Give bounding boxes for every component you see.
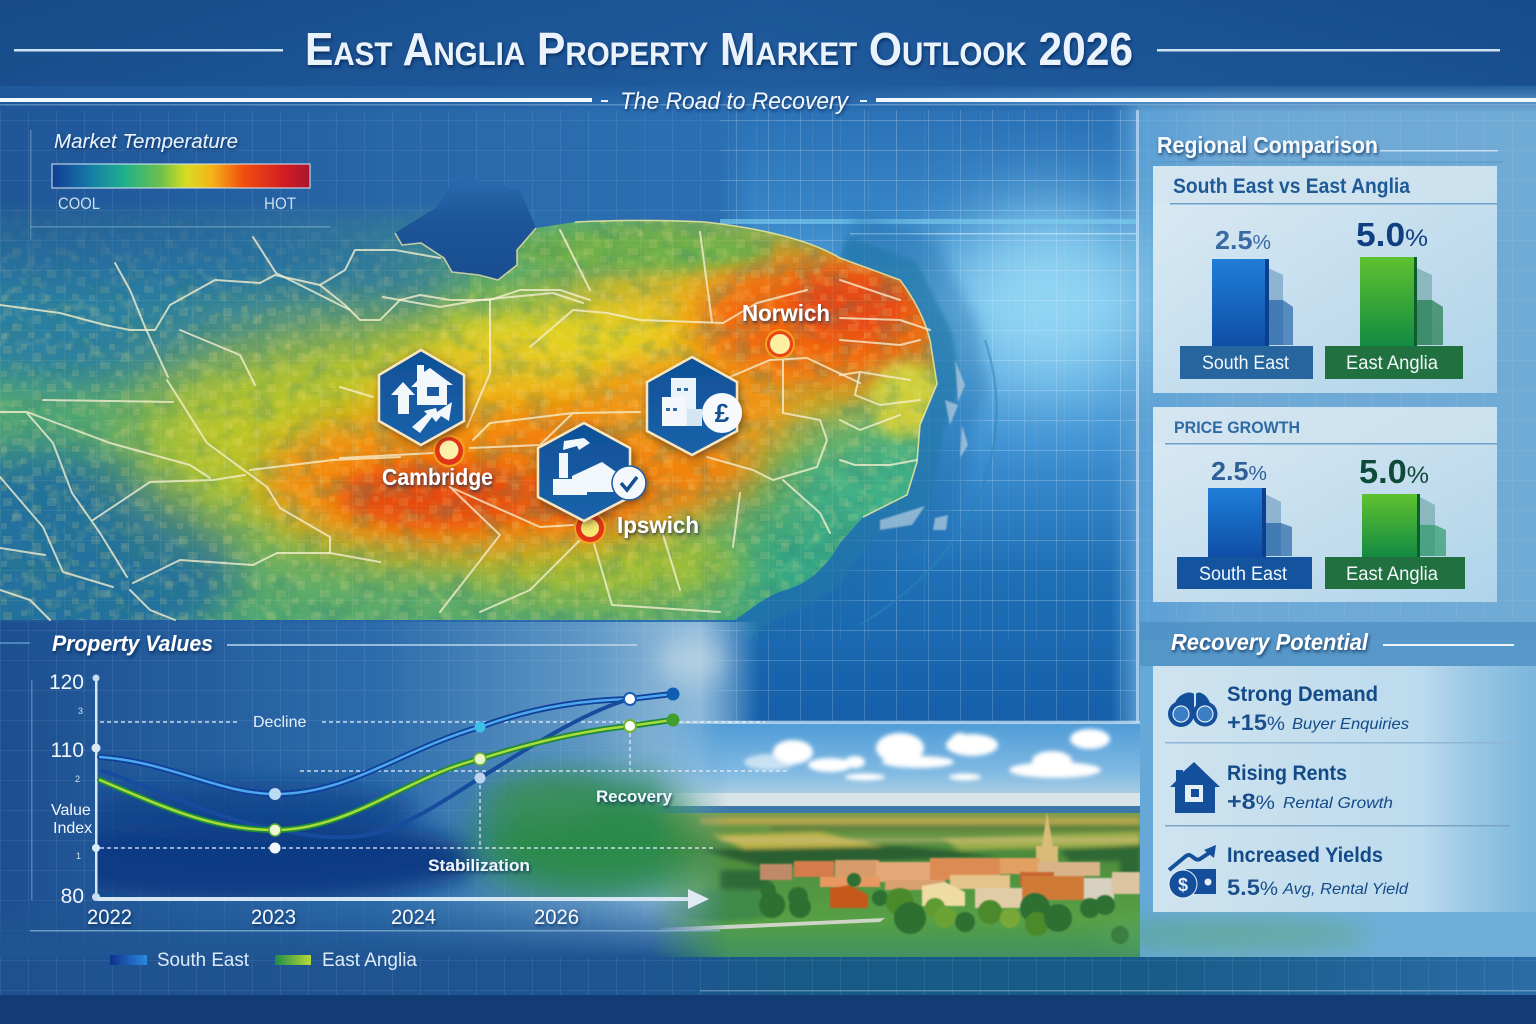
panel: recovery potential: Avg, Rental Yield xyxy=(1282,881,1409,898)
line: South East upper xyxy=(100,694,672,794)
value: 2.5%: 2.5% xyxy=(1215,225,1271,255)
text: rental growth: +8% xyxy=(1227,789,1275,814)
chart legend: East Anglia xyxy=(322,950,417,971)
pin: Ipswich xyxy=(574,512,606,544)
text: increased yields: Increased Yields xyxy=(1227,844,1383,867)
map pins and city labels xyxy=(382,300,830,544)
bar: South East xyxy=(1180,259,1313,379)
value: 5.0%: 5.0% xyxy=(1356,216,1428,253)
coast edge xyxy=(575,220,937,517)
y axis: 120 xyxy=(49,671,84,694)
panel: recovery potential xyxy=(1140,622,1536,912)
the Wash inlet xyxy=(395,175,536,280)
bar: East Anglia: East Anglia xyxy=(1346,564,1438,585)
icon: buildings and pound hexagon: £ xyxy=(715,398,730,428)
chart legend xyxy=(110,950,417,971)
y axis: 1 xyxy=(76,851,81,861)
icon: yields xyxy=(1169,845,1216,898)
panel: property values chart xyxy=(0,631,790,971)
card: price growth: PRICE GROWTH xyxy=(1174,418,1300,437)
x axis labels: 2024 xyxy=(391,906,436,929)
town buildings xyxy=(760,812,1140,908)
offshore shoals xyxy=(880,360,968,530)
road network xyxy=(0,230,930,620)
panel: regional comparison xyxy=(1150,132,1502,602)
heat map of East Anglia xyxy=(0,180,938,621)
bar: East Anglia: East Anglia xyxy=(1346,353,1438,374)
value: 2.5%: 2.5% xyxy=(1211,456,1267,486)
card: South East vs East Anglia: South East vs East Anglia xyxy=(1173,175,1410,198)
icon: buildings and pound hexagon xyxy=(647,357,742,455)
market temperature legend xyxy=(52,131,310,213)
data points xyxy=(269,688,680,854)
market temperature legend: HOT xyxy=(264,194,296,213)
x axis arrow xyxy=(97,889,709,909)
right foreground meadow xyxy=(1090,919,1370,951)
text: rising rents: Rising Rents xyxy=(1227,762,1347,785)
bar: South East: South East xyxy=(1199,564,1288,585)
far fields xyxy=(665,818,1140,921)
market temperature legend: Market Temperature xyxy=(54,131,238,153)
panel: recovery potential: Buyer Enquiries xyxy=(1292,716,1409,733)
heading: property values: Property Values xyxy=(52,631,213,656)
heading: regional comparison: Regional Comparison xyxy=(1157,132,1378,158)
y axis: 3 xyxy=(78,706,83,716)
bar: South East: South East xyxy=(1202,353,1290,374)
y axis: 2 xyxy=(75,774,80,784)
text: strong demand: Strong Demand xyxy=(1227,683,1378,706)
market temperature legend: COOL xyxy=(58,194,100,213)
icon: binoculars xyxy=(1168,692,1218,727)
x axis labels xyxy=(87,906,579,929)
label: stabilization: Stabilization xyxy=(428,856,530,875)
property values chart background xyxy=(0,622,760,957)
x axis labels: 2023 xyxy=(251,906,296,929)
icon: houses and growth arrows hexagon xyxy=(379,350,464,445)
dashed guides xyxy=(100,722,790,848)
value: 5.0%: 5.0% xyxy=(1359,453,1429,490)
bar: East Anglia xyxy=(1325,494,1465,589)
card: price growth xyxy=(1153,407,1497,602)
icon: yields: $ xyxy=(1178,875,1188,895)
x axis labels: 2026 xyxy=(534,906,579,929)
label: Ipswich: Ipswich xyxy=(617,512,699,538)
title: East Anglia Property Market Outlook 2026 xyxy=(305,23,1133,75)
y axis: Value xyxy=(51,802,91,819)
text: rental yield: 5.5% xyxy=(1227,875,1278,900)
heading: recovery potential: Recovery Potential xyxy=(1171,629,1369,655)
icon: house xyxy=(1170,762,1220,813)
chart legend: South East xyxy=(157,950,250,971)
trees and foreground xyxy=(759,873,1129,944)
label: decline: Decline xyxy=(253,714,306,731)
y axis: Index xyxy=(53,820,92,837)
bar: South East xyxy=(1177,488,1312,589)
bottom grid band xyxy=(0,957,1536,1024)
clouds xyxy=(744,729,1110,780)
subtitle: The Road to Recovery xyxy=(620,88,850,115)
panel: recovery potential: Rental Growth xyxy=(1283,795,1393,812)
pin: Norwich xyxy=(765,329,795,359)
title band xyxy=(0,0,1536,115)
line: East Anglia xyxy=(100,720,672,830)
line: South East lower xyxy=(100,699,630,837)
text: buyer enquiries: +15% xyxy=(1227,710,1285,735)
y axis xyxy=(49,671,100,908)
y axis: 110 xyxy=(51,739,84,762)
x axis labels: 2022 xyxy=(87,906,132,929)
offshore water halo xyxy=(735,258,996,625)
landscape with town xyxy=(654,721,1140,957)
bar: East Anglia xyxy=(1325,257,1463,379)
label: recovery: Recovery xyxy=(596,787,673,806)
label: Cambridge: Cambridge xyxy=(382,464,493,490)
label: Norwich: Norwich xyxy=(742,300,830,326)
icon: home with check hexagon xyxy=(538,423,646,521)
pin: Cambridge xyxy=(433,435,465,467)
card: South East vs East Anglia xyxy=(1153,166,1497,393)
y axis: 80 xyxy=(61,885,84,908)
